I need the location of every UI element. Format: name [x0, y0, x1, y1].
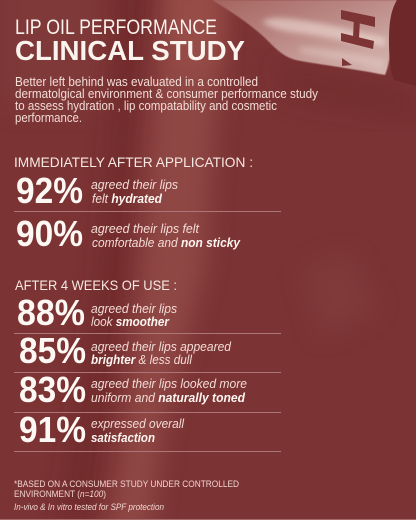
stat: 83% naturally toned: 83% [19, 369, 86, 410]
title [15, 16, 245, 66]
stat: 92% hydrated: agreed their lips [91, 177, 178, 192]
title: LIP OIL PERFORMANCE [15, 16, 217, 39]
heading: after 4 weeks of use: AFTER 4 WEEKS OF USE : [15, 277, 177, 293]
stat: 92% hydrated [16, 170, 178, 211]
title: CLINICAL STUDY [15, 35, 245, 66]
stat: 90% non sticky: 90% [16, 213, 83, 254]
stat: 91% satisfaction: satisfaction [91, 430, 155, 445]
intro paragraph: performance. [15, 111, 82, 125]
footnote: SPF testing: In-vivo & In vitro tested for SPF protection [14, 502, 164, 513]
stat: 90% non sticky: comfortable and non sticky [92, 235, 241, 250]
stat: 85% brighter: 85% [19, 330, 86, 371]
stat: 88% smoother: look smoother [91, 314, 170, 329]
tube cap [389, 0, 416, 86]
stat: 92% hydrated: felt hydrated [92, 191, 163, 206]
heading: immediately after application: IMMEDIATELY AFTER APPLICATION : [14, 154, 253, 170]
stat: 90% non sticky [16, 213, 241, 254]
stat: 85% brighter: brighter & less dull [91, 352, 193, 367]
stat: 83% naturally toned [19, 369, 247, 410]
stat: 91% satisfaction [19, 409, 185, 450]
stat: 85% brighter [19, 330, 232, 371]
stat: 91% satisfaction: 91% [19, 409, 86, 450]
stat: 88% smoother [17, 292, 177, 333]
stat: 88% smoother: agreed their lips [91, 301, 177, 316]
footnote: study basis: ENVIRONMENT (n=100) [14, 489, 106, 500]
stat: 90% non sticky: agreed their lips felt [91, 221, 200, 236]
intro paragraph: dermatolgical environment & consumer performance study [15, 87, 319, 101]
stat: 92% hydrated: 92% [16, 170, 83, 211]
intro paragraph: Better left behind was evaluated in a controlled [15, 75, 258, 89]
intro paragraph [15, 75, 319, 125]
stat: 83% naturally toned: agreed their lips looked more [91, 376, 247, 391]
stat: 85% brighter: agreed their lips appeared [91, 339, 232, 354]
stat: 91% satisfaction: expressed overall [91, 416, 185, 431]
tube lettering [341, 10, 375, 66]
stat: 88% smoother: 88% [17, 292, 85, 333]
stat: 83% naturally toned: uniform and naturally toned [91, 390, 246, 405]
footnote: study basis: *BASED ON A CONSUMER STUDY UNDER CONTROLLED [14, 479, 239, 490]
footnote: study basis [14, 479, 239, 500]
icon: lip oil tube [212, 0, 416, 86]
intro paragraph: to assess hydration , lip compatability and cosmetic [15, 99, 277, 113]
